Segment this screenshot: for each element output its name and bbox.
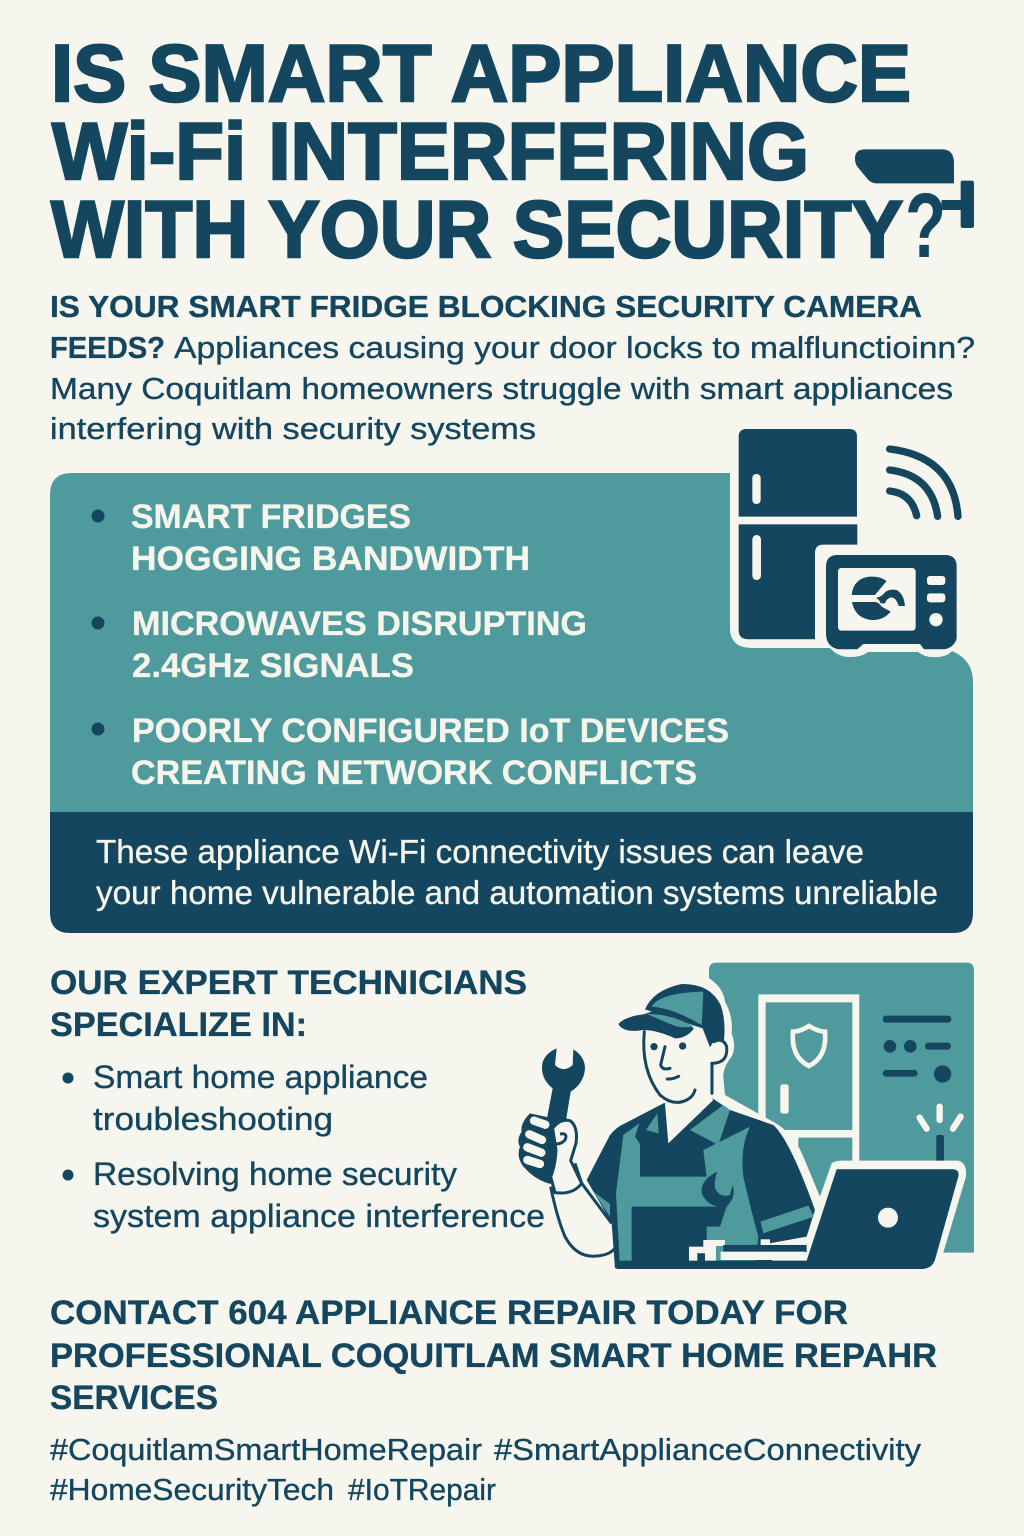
warning band: your home vulnerable and automation systems unreliable <box>96 874 938 911</box>
title: IS SMART APPLIANCE <box>51 29 911 119</box>
cable and arm <box>551 1163 615 1256</box>
overalls <box>616 1123 758 1268</box>
title <box>51 29 946 277</box>
icon: fridge, microwave and wi-fi <box>739 429 958 649</box>
intro text: IS YOUR SMART FRIDGE BLOCKING SECURITY CAMERA <box>50 289 922 324</box>
cap <box>618 984 725 1047</box>
tool and keyboard <box>689 1239 770 1264</box>
warning band: These appliance Wi-Fi connectivity issues can leave <box>96 833 864 870</box>
list of problems: 2.4GHz SIGNALS <box>132 647 414 685</box>
title: WITH YOUR SECURITY <box>51 185 903 275</box>
title: ? <box>905 175 946 277</box>
shirt <box>587 1097 815 1268</box>
call to action: CONTACT 604 APPLIANCE REPAIR TODAY FOR <box>50 1294 848 1332</box>
intro text: interfering with security systems <box>50 411 536 446</box>
intro text <box>50 289 975 446</box>
call to action: SERVICES <box>50 1379 218 1417</box>
list: specialties: system appliance interference <box>93 1198 545 1234</box>
list of problems: CREATING NETWORK CONFLICTS <box>131 754 697 792</box>
heading: expert technicians <box>50 964 527 1044</box>
face <box>644 1025 727 1103</box>
collar and neck <box>665 1095 713 1143</box>
hashtags: #SmartApplianceConnectivity <box>494 1432 922 1467</box>
list of problems <box>92 498 729 792</box>
panel background <box>50 473 973 812</box>
call to action <box>50 1294 937 1417</box>
list of problems: SMART FRIDGES <box>131 498 411 536</box>
intro text: Many Coquitlam homeowners struggle with smart appliances <box>50 371 953 406</box>
fridge <box>739 429 857 639</box>
list: specialties: Resolving home security <box>93 1156 457 1192</box>
list: specialties: troubleshooting <box>93 1101 333 1137</box>
security wall panel <box>709 963 974 1253</box>
heading: expert technicians: OUR EXPERT TECHNICIANS <box>50 964 527 1002</box>
hand <box>518 1113 582 1193</box>
intro text: FEEDS? <box>50 330 165 365</box>
silhouette halo <box>697 960 966 1275</box>
list of problems: HOGGING BANDWIDTH <box>131 540 530 578</box>
wrench <box>542 1048 585 1127</box>
title: Wi-Fi INTERFERING <box>52 107 809 197</box>
wi-fi waves <box>890 449 958 516</box>
list: specialties <box>62 1059 545 1234</box>
list: specialties: Smart home appliance <box>93 1059 428 1095</box>
illustration: technician with security panel <box>518 960 974 1275</box>
hashtags <box>50 1432 922 1507</box>
call to action: PROFESSIONAL COQUITLAM SMART HOME REPAHR <box>50 1337 937 1375</box>
hashtags: #HomeSecurityTech <box>50 1472 334 1507</box>
icon: security camera <box>855 149 974 228</box>
laptop <box>617 1169 959 1269</box>
intro text: Appliances causing your door locks to malflunctioinn? <box>174 330 975 365</box>
warning band <box>50 812 973 933</box>
heading: expert technicians: SPECIALIZE IN: <box>50 1006 307 1044</box>
microwave <box>826 555 957 649</box>
list of problems: POORLY CONFIGURED IoT DEVICES <box>132 712 729 750</box>
hashtags: #CoquitlamSmartHomeRepair <box>50 1432 482 1467</box>
panel: problems <box>50 473 973 933</box>
hashtags: #IoTRepair <box>348 1472 496 1507</box>
list of problems: MICROWAVES DISRUPTING <box>132 605 587 643</box>
